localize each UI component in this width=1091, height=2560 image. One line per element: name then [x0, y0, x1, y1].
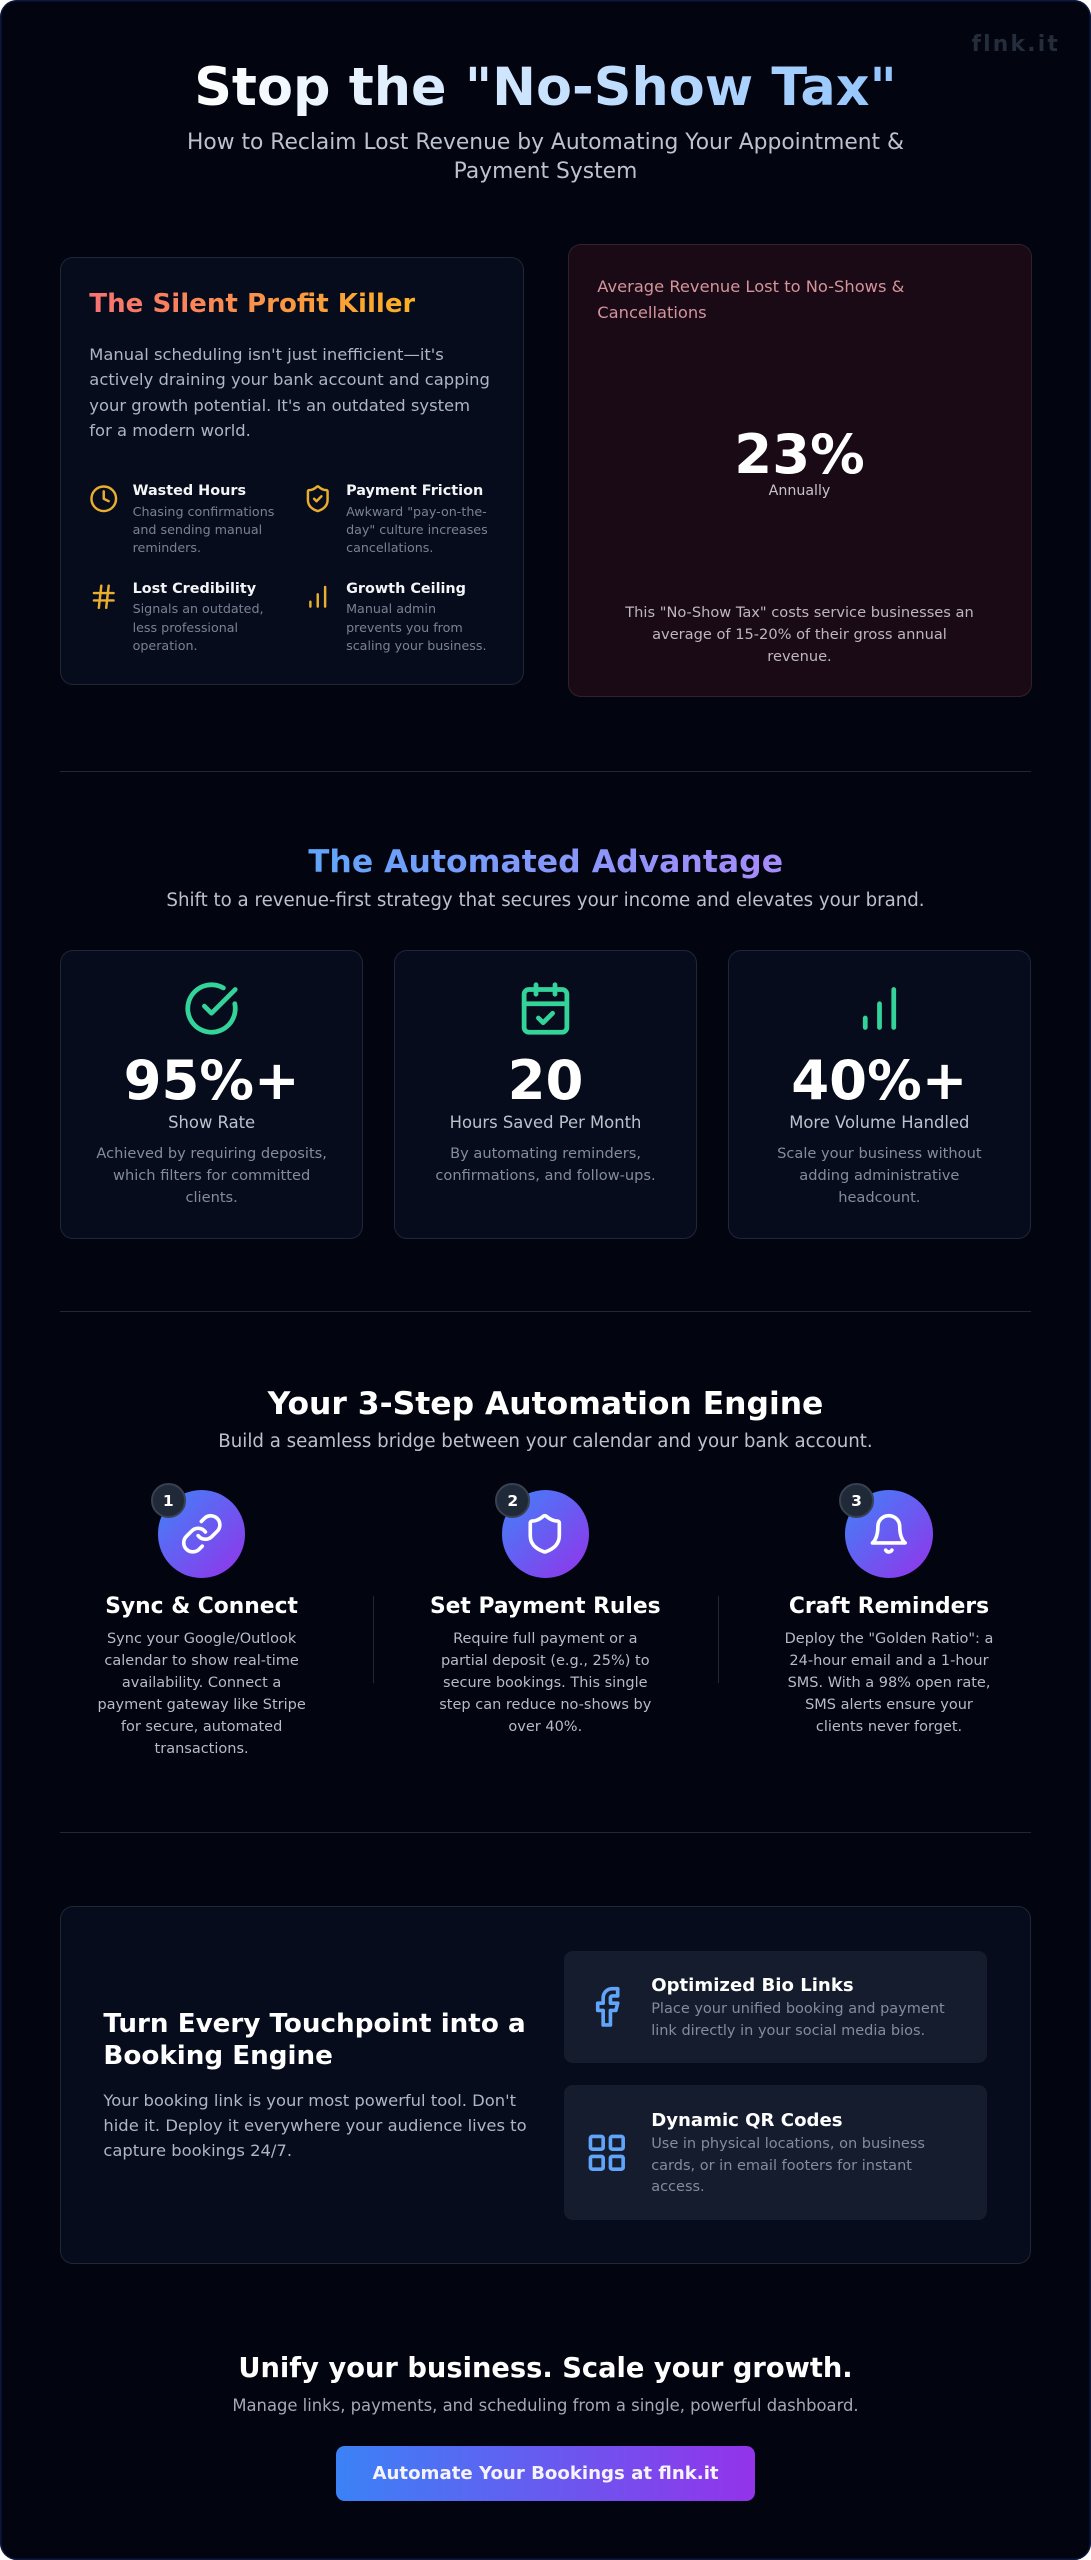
icon: bars — [309, 586, 326, 608]
stat description: confirmations, and follow-ups. — [435, 1167, 656, 1184]
heading: the automated advantage: The Automated Advantage — [308, 844, 783, 880]
icon: shield check — [306, 485, 329, 512]
watermark: flnk.it: flnk.it — [971, 32, 1060, 57]
stat description: clients. — [185, 1189, 238, 1206]
item description: cancellations. — [346, 540, 433, 555]
step description — [439, 1631, 651, 1735]
button: call to action — [336, 2446, 755, 2501]
icon: link in gradient circle — [158, 1490, 245, 1578]
step description: step can reduce no-shows by — [439, 1697, 651, 1713]
item description — [346, 601, 487, 653]
item title: Growth Ceiling — [346, 581, 466, 597]
stat label — [597, 277, 904, 322]
icon: facebook — [596, 1986, 620, 2027]
text: intro paragraph: your growth potential. It's an outdated system — [89, 396, 470, 415]
text: touchpoint paragraph: Your booking link is your most powerful tool. Don't — [103, 2091, 516, 2110]
text: touchpoint paragraph — [103, 2091, 527, 2160]
step title: Set Payment Rules — [430, 1594, 661, 1619]
title: Stop the "No-Show Tax" — [194, 56, 897, 118]
text: intro paragraph — [89, 344, 490, 440]
sub-card description: cards, or in email footers for instant — [651, 2158, 912, 2174]
sub-card title: Optimized Bio Links — [651, 1975, 854, 1996]
stat description — [777, 1145, 982, 1206]
sub-card title: Dynamic QR Codes — [651, 2110, 842, 2131]
card: hours saved — [394, 950, 697, 1239]
stat note: revenue. — [767, 648, 832, 665]
step description: SMS alerts ensure your — [805, 1697, 973, 1713]
step description: Require full payment or a — [453, 1631, 638, 1647]
sub-card description — [651, 2136, 925, 2195]
sub-card description: link directly in your social media bios. — [651, 2023, 925, 2039]
heading: turn every touchpoint: Booking Engine — [103, 2041, 333, 2071]
stat label: Hours Saved Per Month — [450, 1113, 641, 1132]
subtitle — [187, 130, 904, 184]
item description: less professional — [133, 620, 238, 635]
card: volume handled — [728, 950, 1031, 1239]
heading: turn every touchpoint — [103, 2009, 526, 2071]
step number badge: 3 — [851, 1492, 862, 1510]
stat description: Achieved by requiring deposits, — [96, 1145, 327, 1162]
footer subtitle: Manage links, payments, and scheduling from a single, powerful dashboard. — [232, 2396, 859, 2415]
item description: Awkward "pay-on-the- — [346, 504, 487, 518]
step description: calendar to show real-time — [104, 1653, 299, 1669]
step title: Craft Reminders — [789, 1594, 989, 1619]
stat note — [625, 604, 974, 665]
button: call to action: Automate Your Bookings at flnk.it — [372, 2463, 719, 2484]
big number: 23%: 23% — [734, 422, 865, 486]
step number badge: 1 — [163, 1492, 174, 1510]
step description: Deploy the "Golden Ratio": a — [785, 1631, 993, 1647]
item: growth ceiling — [309, 581, 487, 653]
step description — [97, 1631, 306, 1757]
icon: bell in gradient circle — [845, 1490, 933, 1578]
item description: reminders. — [133, 540, 201, 555]
stat label: More Volume Handled — [789, 1113, 969, 1132]
step number badge — [495, 1483, 530, 1518]
subtitle: Payment System — [454, 159, 637, 184]
text: intro paragraph: for a modern world. — [89, 421, 251, 440]
stat label: Show Rate — [168, 1113, 255, 1132]
panel: the silent profit killer — [60, 257, 524, 685]
step description: over 40%. — [508, 1719, 582, 1735]
heading: turn every touchpoint: Turn Every Touchpoint into a — [103, 2009, 526, 2039]
step description — [785, 1631, 993, 1735]
item: wasted hours — [90, 483, 274, 555]
text: touchpoint paragraph: hide it. Deploy it everywhere your audience lives to — [103, 2116, 527, 2135]
step description: 24-hour email and a 1-hour — [789, 1653, 989, 1669]
sub-card description: Use in physical locations, on business — [651, 2136, 925, 2152]
sub-card: dynamic qr codes — [564, 2085, 987, 2220]
icon: hash — [92, 584, 115, 609]
stat description: adding administrative — [799, 1167, 959, 1184]
stat caption: Annually — [769, 483, 830, 499]
sub-card description — [651, 2001, 945, 2039]
step number badge — [839, 1483, 874, 1518]
item description: scaling your business. — [346, 638, 487, 653]
item description: prevents you from — [346, 620, 463, 635]
stat note: This "No-Show Tax" costs service businesses an — [625, 604, 974, 621]
stat label: Cancellations — [597, 303, 707, 322]
stat description — [435, 1145, 656, 1184]
item title: Wasted Hours — [133, 483, 246, 499]
step description: SMS. With a 98% open rate, — [788, 1675, 990, 1691]
item description — [133, 601, 264, 653]
icon: shield in gradient circle — [502, 1490, 589, 1578]
step title: Sync & Connect — [105, 1594, 298, 1619]
card: show rate — [60, 950, 363, 1239]
sub-card description: access. — [651, 2179, 705, 2195]
text: advantage subtitle: Shift to a revenue-first strategy that secures your income and elevates your brand. — [166, 890, 925, 911]
icon: check circle — [185, 982, 238, 1035]
stat: 20: 20 — [508, 1048, 583, 1112]
step description: partial deposit (e.g., 25%) to — [441, 1653, 650, 1669]
stat description: headcount. — [838, 1189, 920, 1206]
icon: grid — [588, 2134, 625, 2171]
step number badge: 2 — [507, 1492, 518, 1510]
item description: operation. — [133, 638, 198, 653]
stat description: which filters for committed — [113, 1167, 310, 1184]
panel: revenue lost stat — [568, 244, 1032, 697]
step description: secure bookings. This single — [443, 1675, 648, 1691]
step description: transactions. — [155, 1741, 249, 1757]
footer heading: Unify your business. Scale your growth. — [238, 2353, 853, 2384]
item description: and sending manual — [133, 522, 262, 537]
heading: 3-step automation engine: Your 3-Step Automation Engine — [268, 1386, 823, 1422]
text: engine subtitle: Build a seamless bridge between your calendar and your bank account. — [218, 1431, 873, 1452]
item description — [133, 504, 274, 555]
step description: clients never forget. — [816, 1719, 962, 1735]
icon: bars — [862, 987, 896, 1030]
item description: day" culture increases — [346, 522, 488, 537]
stat note: average of 15-20% of their gross annual — [652, 626, 947, 643]
item: payment friction — [306, 483, 488, 555]
item description: Manual admin — [346, 601, 436, 616]
subtitle: How to Reclaim Lost Revenue by Automating Your Appointment & — [187, 130, 904, 155]
text: touchpoint paragraph: capture bookings 24/7. — [103, 2141, 292, 2160]
panel: touchpoints — [60, 1906, 1031, 2264]
step 3: craft reminders — [785, 1483, 993, 1735]
sub-card description: Place your unified booking and payment — [651, 2001, 945, 2017]
step number badge — [151, 1483, 186, 1518]
stat: 40%+: 40%+ — [791, 1048, 967, 1112]
item: lost credibility — [92, 581, 264, 653]
icon: clock — [90, 485, 118, 512]
step 1: sync and connect — [97, 1483, 306, 1757]
heading: the silent profit killer: The Silent Profit Killer — [89, 289, 415, 319]
stat description: Scale your business without — [777, 1145, 982, 1162]
stat description: By automating reminders, — [450, 1145, 641, 1162]
step description: payment gateway like Stripe — [97, 1697, 306, 1713]
step description: for secure, automated — [121, 1719, 282, 1735]
item title: Lost Credibility — [133, 581, 256, 597]
stat: 95%+: 95%+ — [124, 1048, 300, 1112]
item description — [346, 504, 488, 555]
step description: Sync your Google/Outlook — [107, 1631, 296, 1647]
stat label: Average Revenue Lost to No-Shows & — [597, 277, 904, 296]
step 2: set payment rules — [430, 1483, 661, 1735]
text: intro paragraph: Manual scheduling isn't just inefficient—it's — [89, 344, 444, 364]
item title: Payment Friction — [346, 483, 483, 499]
step description: availability. Connect a — [122, 1675, 281, 1691]
sub-card: optimized bio links — [564, 1951, 987, 2063]
icon: calendar check — [522, 982, 570, 1035]
item description: Signals an outdated, — [133, 601, 264, 616]
stat description — [96, 1145, 327, 1206]
item description: Chasing confirmations — [133, 504, 274, 518]
text: intro paragraph: actively draining your bank account and capping — [89, 370, 490, 389]
